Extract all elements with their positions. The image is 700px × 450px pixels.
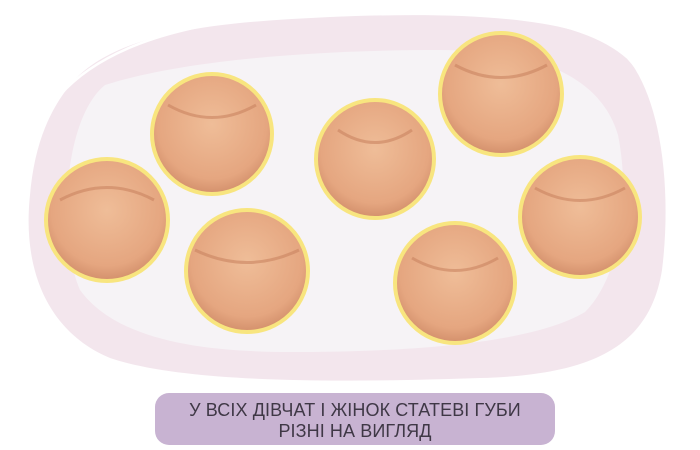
circle 6	[395, 223, 515, 343]
circle 5	[440, 33, 562, 155]
caption	[155, 393, 555, 445]
circle 1	[46, 159, 168, 281]
circle 2	[152, 74, 272, 194]
caption: У ВСІХ ДІВЧАТ І ЖІНОК СТАТЕВІ ГУБИ	[189, 400, 521, 420]
caption: РІЗНІ НА ВИГЛЯД	[278, 421, 432, 441]
circle 3	[186, 210, 308, 332]
circle 7	[520, 157, 640, 277]
background blob	[29, 11, 670, 388]
circle 4	[316, 100, 434, 218]
